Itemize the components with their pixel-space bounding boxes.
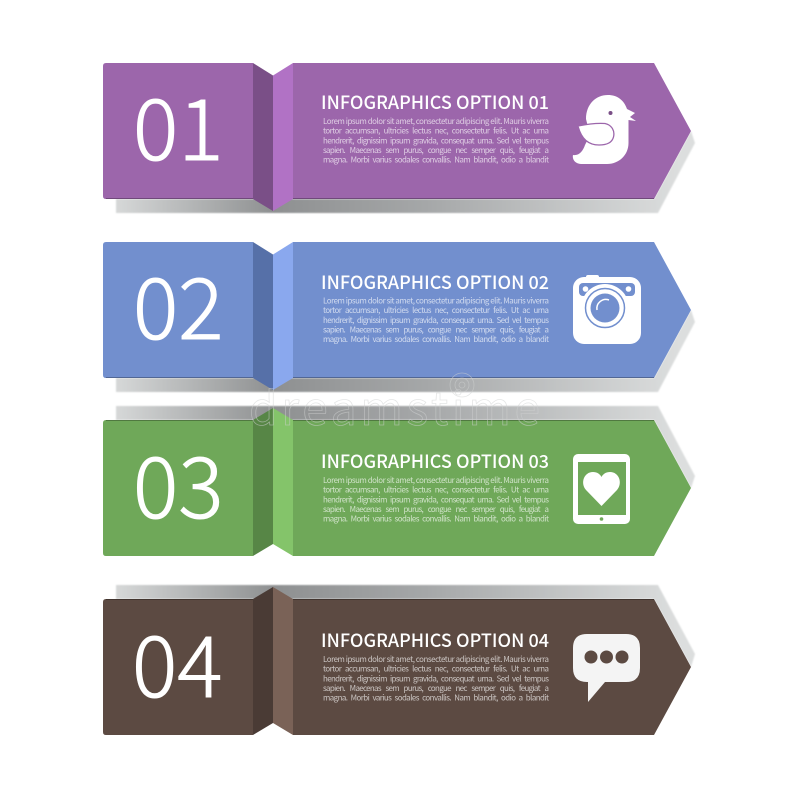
fold 03 — [253, 408, 293, 556]
number 01: 01 — [133, 63, 223, 185]
body text 01: Lorem ipsum dolor sit amet, consectetur adipiscing elit. Mauris viverra — [323, 116, 549, 127]
body text 03: tortor accumsan, ultricies lectus nec, consectetur felis. Ut ac urna — [323, 485, 549, 496]
shadow 02 — [116, 310, 695, 392]
body text 02: magna. Morbi varius sodales convallis. Nam blandit, odio a blandit — [323, 334, 549, 345]
icon: tablet with heart — [573, 454, 630, 524]
heading 03: INFOGRAPHICS OPTION 03 — [321, 448, 549, 474]
icon: camera — [573, 275, 641, 344]
body text 02: hendrerit, dignissim ipsum gravida, consequat urna. Sed vel tempus — [323, 315, 549, 326]
body text 02: Lorem ipsum dolor sit amet, consectetur adipiscing elit. Mauris viverra — [323, 296, 549, 306]
fold 02 — [253, 242, 293, 390]
body text 01: hendrerit, dignissim ipsum gravida, consequat urna. Sed vel tempus — [323, 135, 549, 146]
body text 04: hendrerit, dignissim ipsum gravida, consequat urna. Sed vel tempus — [323, 673, 549, 684]
body text 01: magna. Morbi varius sodales convallis. Nam blandit, odio a blandit — [323, 155, 549, 166]
body text 03: magna. Morbi varius sodales convallis. Nam blandit, odio a blandit — [323, 514, 549, 525]
body text 02 — [323, 296, 549, 345]
body text 04: sapien. Maecenas sem purus, congue nec semper quis, feugiat a — [323, 683, 549, 694]
icon: speech bubble — [573, 634, 640, 702]
band 01 — [103, 63, 691, 199]
body text 01: tortor accumsan, ultricies lectus nec, consectetur felis. Ut ac urna — [323, 126, 549, 137]
fold 01 — [253, 63, 293, 211]
body text 02: sapien. Maecenas sem purus, congue nec semper quis, feugiat a — [323, 324, 549, 336]
number 02: 02 — [133, 242, 223, 364]
shadow 03 — [116, 406, 695, 488]
icon: bird — [573, 95, 636, 164]
body text 01: sapien. Maecenas sem purus, congue nec semper quis, feugiat a — [323, 145, 549, 156]
watermark: dreamstime — [249, 373, 540, 439]
heading 01: INFOGRAPHICS OPTION 01 — [321, 89, 549, 115]
body text 03: sapien. Maecenas sem purus, congue nec semper quis, feugiat a — [323, 504, 549, 515]
band 04 — [103, 599, 691, 735]
body text 04: tortor accumsan, ultricies lectus nec, consectetur felis. Ut ac urna — [323, 664, 549, 675]
body text 04: magna. Morbi varius sodales convallis. Nam blandit, odio a blandit — [323, 693, 549, 704]
body text 01 — [323, 116, 549, 166]
panel: option 02 — [103, 242, 695, 392]
body text 04 — [323, 654, 549, 704]
shadow 04 — [116, 585, 695, 667]
body text 02: tortor accumsan, ultricies lectus nec, consectetur felis. Ut ac urna — [323, 305, 549, 316]
panel: option 01 — [103, 63, 695, 213]
band 03 — [103, 420, 691, 556]
number 03: 03 — [133, 421, 223, 543]
heading 04: INFOGRAPHICS OPTION 04 — [321, 627, 549, 653]
heading 02: INFOGRAPHICS OPTION 02 — [321, 269, 549, 295]
band 02 — [103, 242, 691, 378]
number 04: 04 — [132, 600, 222, 722]
panel: option 04 — [103, 585, 695, 735]
fold 04 — [253, 587, 293, 735]
body text 03 — [323, 475, 549, 525]
body text 03: Lorem ipsum dolor sit amet, consectetur adipiscing elit. Mauris viverra — [323, 475, 549, 486]
shadow 01 — [116, 131, 695, 213]
panel: option 03 — [103, 406, 695, 556]
body text 03: hendrerit, dignissim ipsum gravida, consequat urna. Sed vel tempus — [323, 494, 549, 505]
body text 04: Lorem ipsum dolor sit amet, consectetur adipiscing elit. Mauris viverra — [323, 654, 549, 665]
